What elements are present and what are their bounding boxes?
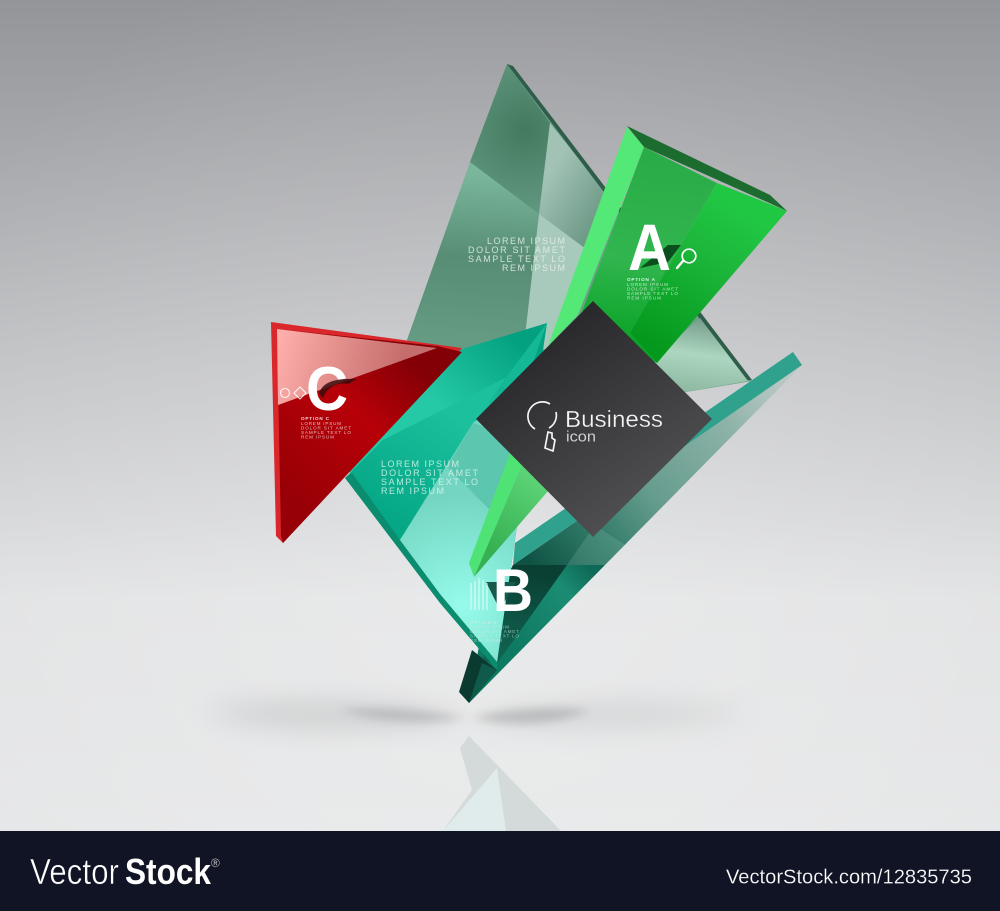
text: option A [627,277,678,300]
text: option A: DOLOR SIT AMET [627,286,678,292]
heading: Business: Business [565,406,663,432]
icon: vertical lines [471,578,487,610]
icon: key [528,402,556,451]
text: option A: LOREM IPSUM [627,282,668,287]
text: option C: SAMPLE TEXT LO [301,430,351,435]
text: option B: LOREM IPSUM [470,624,509,630]
text: large triangle caption [468,236,566,273]
footer bar [0,831,1000,911]
text: option B: DOLOR SIT AMET [470,629,519,634]
logo: VectorStock: Stock [125,851,212,892]
text: large triangle caption: LOREM IPSUM [487,236,565,246]
letter B: B [493,557,533,624]
text: option C [301,416,351,440]
icon: magnifier [677,249,696,268]
logo: VectorStock [30,851,220,892]
dark lower side [459,650,497,703]
text: image id: VectorStock.com/12835735 [726,866,972,888]
text: option C: LOREM IPSUM [301,421,341,426]
letter B shadow [486,582,516,610]
panel: large translucent green triangle [407,64,752,396]
text: teal triangle caption: DOLOR SIT AMET [381,468,478,478]
text: option A: REM IPSUM [627,296,661,300]
text: option A: OPTION A [627,277,656,282]
text: teal triangle caption: LOREM IPSUM [381,459,459,469]
text: large triangle caption: DOLOR SIT AMET [468,245,566,255]
panel: dark square [476,301,712,537]
C accent shadow [319,379,357,398]
floor shadow [200,701,750,729]
text: option A: SAMPLE TEXT LO [627,291,678,296]
text: large triangle caption: SAMPLE TEXT LO [468,254,565,264]
panel: green triangle A: A [628,210,671,284]
text: icon: icon [566,430,596,446]
text: option C: OPTION C [301,416,330,421]
logo: VectorStock: Vector [30,851,119,892]
panel: back teal plate [459,352,802,703]
text: option B [470,620,519,643]
text: teal triangle caption: REM IPSUM [381,486,444,496]
panel: red triangle C [271,322,462,543]
text: option B: OPTION B [470,620,498,625]
floor reflection [443,736,561,831]
icon: circle and diamond [280,387,306,399]
letter C: C [306,355,348,424]
text: teal triangle caption [381,459,478,496]
text: option B: REM IPSUM [470,638,502,643]
text: option C: REM IPSUM [301,434,334,440]
panel: teal triangle B [340,323,548,670]
text: large triangle caption: REM IPSUM [502,263,565,273]
text: teal triangle caption: SAMPLE TEXT LO [381,477,478,487]
text: option C: DOLOR SIT AMET [301,426,351,430]
panel: green triangle A [548,126,787,363]
logo: VectorStock: ® [211,856,220,870]
tail of green panel [469,453,548,577]
letter A [640,245,681,268]
text: option B: SAMPLE TEXT LO [470,634,519,638]
